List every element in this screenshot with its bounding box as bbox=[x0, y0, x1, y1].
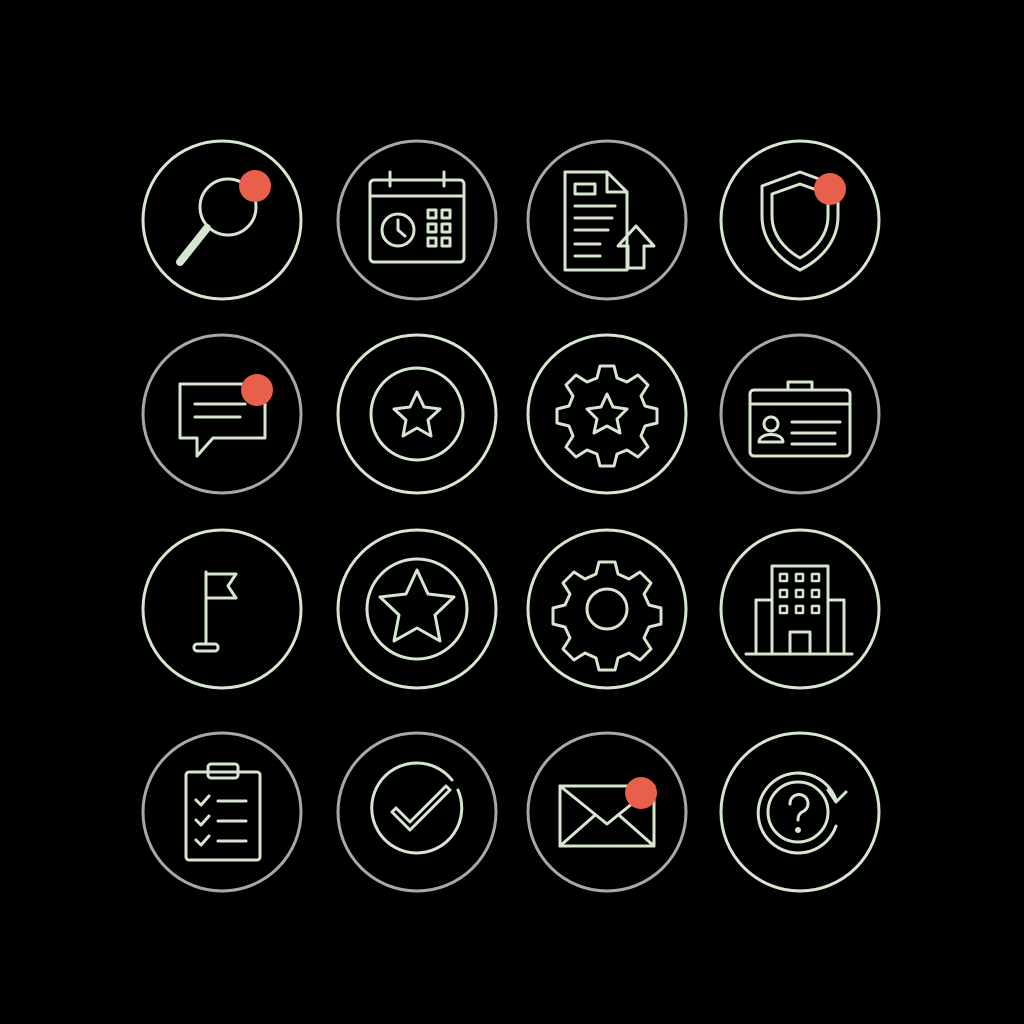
icon: check bbox=[338, 733, 496, 891]
icon: shield bbox=[721, 141, 879, 299]
icon: clipboard bbox=[143, 733, 301, 891]
icon: big star bbox=[338, 530, 496, 688]
icon: chat bbox=[143, 335, 301, 493]
icon: document upload bbox=[528, 141, 686, 299]
icon: id card bbox=[721, 335, 879, 493]
icon: flag bbox=[143, 530, 301, 688]
icon: building bbox=[721, 530, 879, 688]
icon: envelope bbox=[528, 733, 686, 891]
icon: gear bbox=[528, 530, 686, 688]
icon: star badge bbox=[338, 335, 496, 493]
icon: question refresh bbox=[721, 733, 879, 891]
icon: search bbox=[143, 141, 301, 299]
icon: gear star bbox=[528, 335, 686, 493]
icon: calendar bbox=[338, 141, 496, 299]
